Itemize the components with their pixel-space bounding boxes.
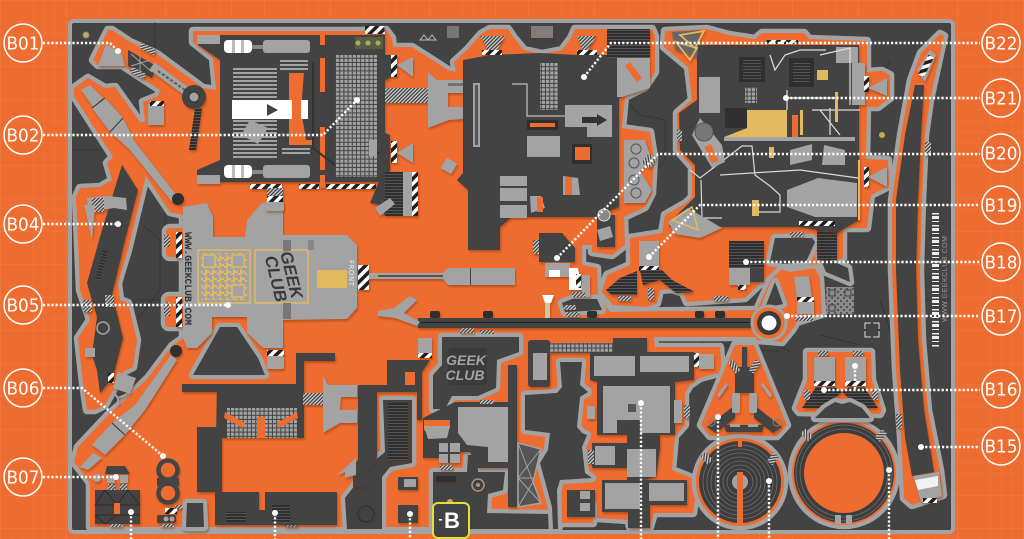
panel: central orange cut-out	[74, 29, 822, 527]
board marks	[83, 26, 885, 138]
B20 device	[441, 26, 657, 250]
callout B22	[982, 24, 1020, 62]
callout B20	[982, 134, 1020, 172]
connector tabs of the centre panel	[265, 188, 284, 369]
B15 banana part	[896, 50, 942, 503]
B16 part	[802, 351, 878, 418]
logo	[261, 249, 307, 306]
logo: CLUB	[261, 254, 291, 304]
B21 B22 circuit board	[668, 30, 887, 238]
panel: islands of board on orange	[193, 238, 850, 529]
corner brackets	[865, 323, 879, 337]
lower left frame device	[182, 353, 357, 525]
B17 light ring	[752, 306, 813, 340]
QR code on board	[826, 287, 854, 314]
callout B05	[4, 286, 42, 324]
callout B01: B01	[6, 34, 40, 54]
B02 main device	[197, 26, 463, 216]
callout B21	[982, 79, 1020, 117]
left USB cable lower	[80, 345, 182, 470]
left USB cable upper	[81, 85, 184, 205]
ring	[796, 425, 892, 524]
right cluster of grey panels	[567, 352, 714, 528]
callout B06	[4, 369, 42, 407]
callout B17: B17	[984, 306, 1018, 328]
B04 boomerang piece	[83, 165, 138, 405]
cup component and mesh strip	[528, 338, 647, 387]
triangular part	[707, 347, 782, 433]
callout B05: B05	[6, 296, 40, 316]
callout B22: B22	[984, 34, 1018, 54]
callout B02	[4, 116, 42, 154]
X-brace frame	[518, 443, 541, 507]
island logo	[446, 330, 494, 404]
callout B18	[982, 243, 1020, 281]
USB cable right of panel	[369, 268, 515, 285]
callout B16: B16	[984, 380, 1018, 400]
callout B01	[4, 24, 42, 62]
panel: ring cut-out	[792, 421, 896, 525]
callout B19: B19	[984, 196, 1018, 216]
stair panel island	[358, 403, 408, 522]
B01 robot arm	[98, 43, 206, 150]
plate seams on the board	[72, 22, 950, 510]
highlighted B badge	[433, 499, 469, 538]
island logo: CLUB	[446, 367, 484, 383]
callout B17	[982, 297, 1020, 335]
callout B20: B20	[984, 144, 1018, 164]
QR code	[198, 250, 250, 303]
highlighted B badge: B	[444, 508, 460, 533]
logo: GEEK	[276, 249, 307, 302]
callout B06: B06	[6, 378, 40, 400]
callout B07: B07	[6, 468, 40, 488]
panel: triangular cut-out	[701, 345, 787, 436]
callout B19	[982, 186, 1020, 224]
callout B07	[4, 458, 42, 496]
callout B02: B02	[6, 126, 40, 146]
callout B18: B18	[984, 252, 1018, 274]
spiral disc	[699, 441, 781, 523]
callout B16	[982, 370, 1020, 408]
panel: B16 cut-out	[796, 352, 882, 414]
callout B15: B15	[984, 436, 1018, 458]
panel: spiral disc cut-out	[696, 438, 784, 526]
callout B04	[4, 205, 42, 243]
B18 B19 lower pieces	[533, 228, 837, 318]
star panel and grey panel	[423, 365, 517, 507]
panel: right orange cut-out	[602, 29, 890, 307]
leader end dots	[113, 48, 924, 517]
callout B15	[982, 427, 1020, 465]
panel: hazard cut-outs beside the centre panel	[164, 228, 184, 327]
bar and wrench	[377, 296, 758, 333]
dark component with window	[337, 338, 432, 523]
barcode and web address on right edge: WWW.GEEKCLUB.COM	[942, 236, 949, 322]
island logo: GEEK	[446, 352, 487, 368]
web address: WWW.GEEKCLUB.COM	[181, 232, 192, 325]
callout B04: B04	[6, 214, 40, 236]
callout B21: B21	[984, 88, 1018, 110]
front label: FRONT	[347, 260, 355, 287]
barcode and web address on right edge	[936, 213, 949, 348]
B07 triangle block	[93, 466, 298, 527]
panel: banana-shaped orange cut-out	[892, 34, 944, 505]
B06 rings	[157, 460, 204, 527]
B05 centre panel	[176, 203, 369, 348]
